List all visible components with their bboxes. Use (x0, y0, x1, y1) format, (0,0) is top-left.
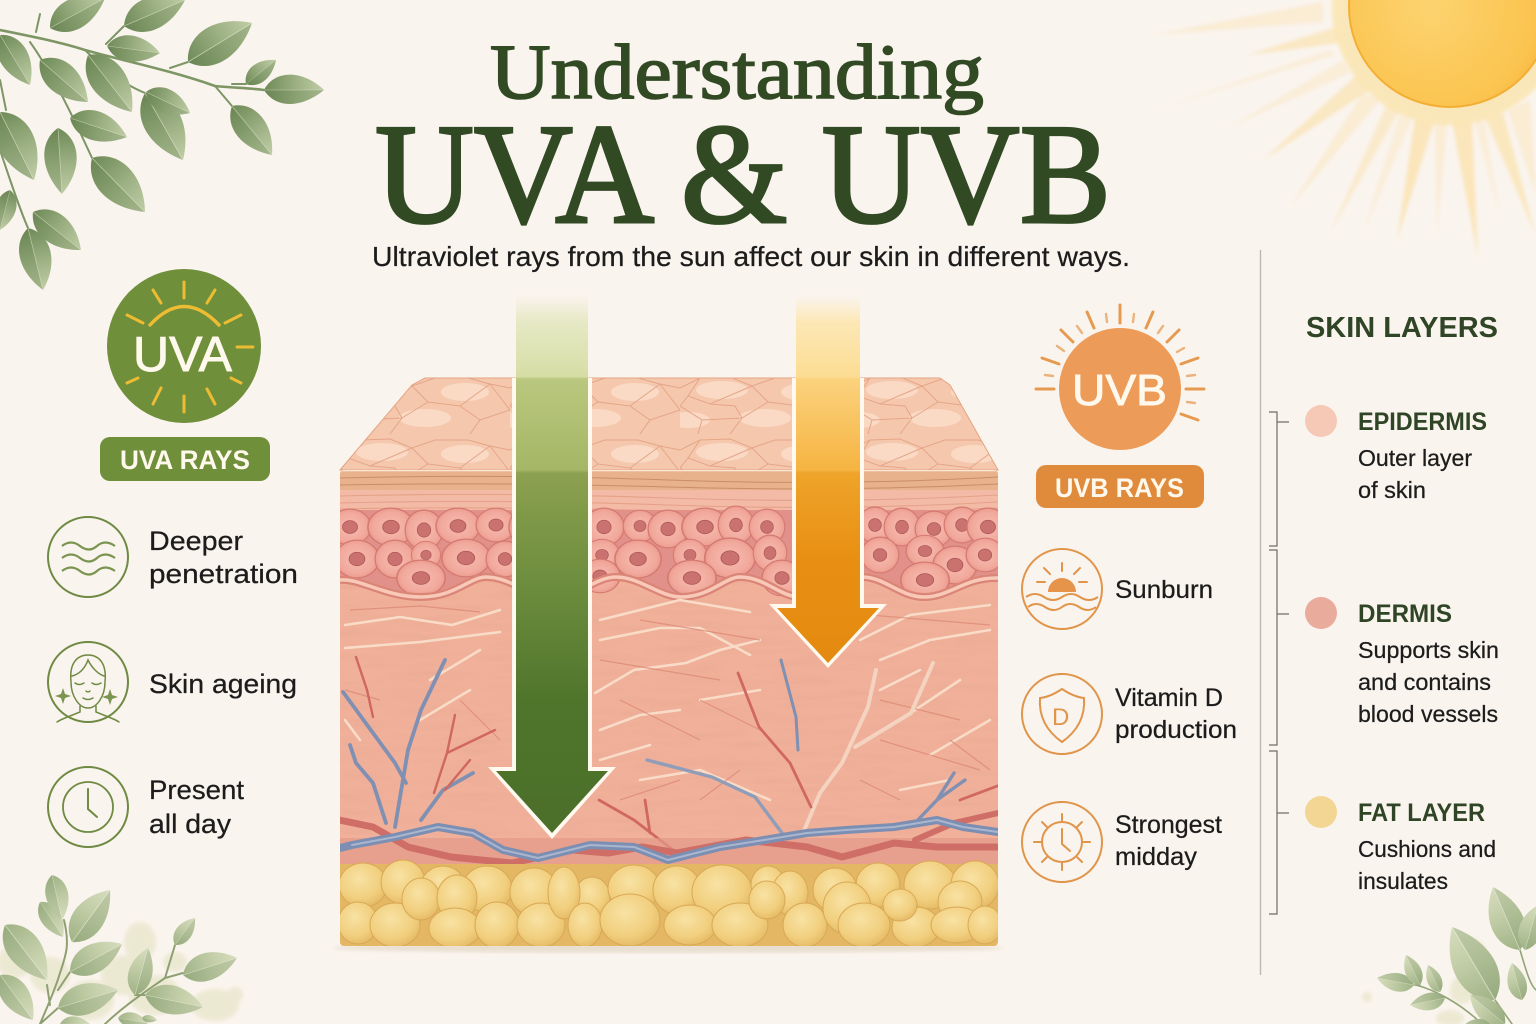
UVA badge: UVA (133, 328, 232, 382)
main blood vessels (339, 813, 998, 863)
stratum corneum (340, 470, 998, 490)
sun rays (1153, 2, 1536, 257)
flattened cell layer (340, 490, 998, 510)
UVB RAYS pill: UVB RAYS (1055, 473, 1184, 503)
legend: fat layer (1305, 796, 1496, 894)
basement membrane wave (340, 577, 998, 600)
UVA RAYS pill: UVA RAYS (120, 445, 250, 475)
legend: epidermis: of skin (1358, 477, 1426, 503)
arrow: UVA green (488, 295, 616, 839)
legend: fat layer: Cushions and (1358, 836, 1496, 862)
legend: dermis: blood vessels (1358, 701, 1498, 727)
title (375, 28, 1111, 253)
item: strongest midday: Strongest (1115, 811, 1222, 839)
blood vessel branches (343, 657, 1000, 853)
decoration: top-left leaves (0, 0, 324, 293)
legend: dermis: and contains (1358, 669, 1491, 695)
UVA badge (107, 269, 261, 423)
item: vitamin D: production (1115, 716, 1237, 744)
skin cross-section block (329, 378, 1009, 953)
item: vitamin D: D (1052, 704, 1069, 731)
item: deeper penetration (48, 517, 298, 597)
fat layer (338, 860, 1002, 948)
item: strongest midday (1022, 802, 1222, 882)
item: present all day (48, 767, 244, 847)
legend: epidermis: EPIDERMIS (1358, 408, 1487, 436)
panel: UVA rays (48, 269, 298, 847)
title: UVA & UVB (375, 95, 1111, 253)
legend: dermis: Supports skin (1358, 637, 1499, 663)
decoration: bottom-right leaves (1362, 881, 1536, 1024)
dermis base (340, 575, 998, 870)
item: skin ageing (48, 642, 297, 722)
decoration: bottom-left leaves (0, 872, 243, 1024)
item: sunburn: Sunburn (1115, 576, 1213, 604)
legend: epidermis (1305, 405, 1487, 503)
UVB badge: UVB (1072, 366, 1167, 415)
legend: fat layer: insulates (1358, 868, 1448, 894)
epidermal cells (329, 506, 1009, 598)
legend: dermis: DERMIS (1358, 600, 1452, 628)
item: sunburn (1022, 549, 1213, 629)
panel: UVB rays (1022, 305, 1237, 882)
brackets (1269, 412, 1289, 914)
item: vitamin D (1022, 674, 1237, 754)
UVA RAYS pill (100, 437, 270, 481)
item: present all day: Present (149, 775, 244, 805)
panel: skin layers legend (1260, 250, 1499, 975)
title: Understanding (490, 28, 984, 115)
item: vitamin D: Vitamin D (1115, 684, 1223, 712)
UVB RAYS pill (1036, 465, 1204, 508)
subtitle: Ultraviolet rays from the sun affect our skin in different ways. (372, 241, 1130, 272)
decoration: watercolor sun (1153, 0, 1536, 257)
heading: skin layers: SKIN LAYERS (1306, 312, 1498, 344)
item: strongest midday: midday (1115, 843, 1198, 871)
item: present all day: all day (149, 809, 232, 839)
collagen fibres (345, 600, 990, 800)
UVB badge (1036, 305, 1204, 450)
arrow: UVB orange (769, 295, 887, 668)
subdermal band (340, 838, 998, 864)
legend: epidermis: Outer layer (1358, 445, 1472, 471)
item: skin ageing: Skin ageing (149, 669, 297, 699)
legend: fat layer: FAT LAYER (1358, 799, 1485, 827)
item: deeper penetration: penetration (149, 559, 298, 589)
legend: dermis (1305, 597, 1499, 727)
item: deeper penetration: Deeper (149, 526, 243, 556)
top surface of skin (340, 378, 998, 470)
